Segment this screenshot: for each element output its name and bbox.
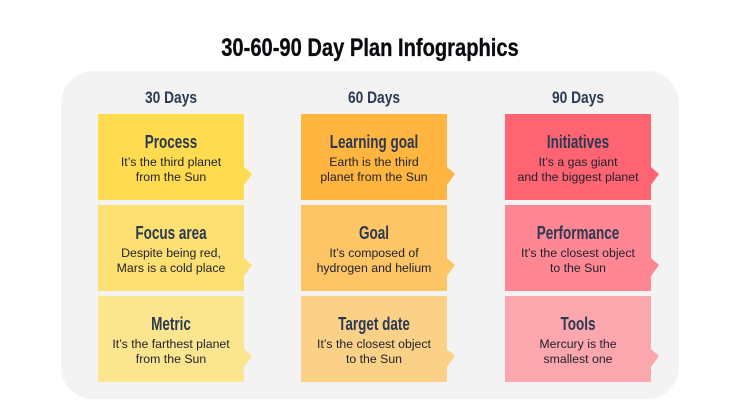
- card: Learning goal: [301, 114, 455, 200]
- heading: 60 Days: 60 Days: [348, 88, 400, 107]
- card: Performance: It’s the closest object: [521, 246, 635, 260]
- card: Metric: from the Sun: [136, 352, 206, 366]
- card: Learning goal: planet from the Sun: [320, 170, 428, 184]
- card: Performance: [505, 205, 659, 291]
- card: Performance: to the Sun: [550, 261, 606, 275]
- card: Tools: [505, 296, 659, 382]
- card: Metric: Metric: [151, 314, 191, 334]
- card: Tools: Tools: [560, 314, 595, 334]
- card: Metric: It’s the farthest planet: [112, 337, 230, 351]
- card: Learning goal: Earth is the third: [329, 155, 419, 169]
- card: Process: [98, 114, 252, 200]
- card: Goal: hydrogen and helium: [317, 261, 431, 275]
- card: Tools: Mercury is the: [539, 337, 617, 351]
- card: Focus area: Despite being red,: [121, 246, 221, 260]
- card: Target date: [301, 296, 455, 382]
- card: Initiatives: It’s a gas giant: [538, 155, 618, 169]
- card: Metric: [98, 296, 252, 382]
- card: Process: It’s the third planet: [121, 155, 221, 169]
- panel: background: [61, 71, 679, 399]
- card: Learning goal: Learning goal: [330, 132, 418, 152]
- card: Initiatives: [505, 114, 659, 200]
- card: Focus area: [98, 205, 252, 291]
- heading: 30 Days: 30 Days: [145, 88, 197, 107]
- card: Initiatives: and the biggest planet: [517, 170, 639, 184]
- card: Initiatives: Initiatives: [547, 132, 609, 152]
- card: Focus area: Mars is a cold place: [117, 261, 225, 275]
- card: Goal: It’s composed of: [329, 246, 419, 260]
- heading: 90 Days: 90 Days: [552, 88, 604, 107]
- card: Process: Process: [145, 132, 197, 152]
- card: Tools: smallest one: [543, 352, 613, 366]
- card: Target date: to the Sun: [346, 352, 402, 366]
- card: Goal: Goal: [359, 223, 389, 243]
- card: Process: from the Sun: [136, 170, 206, 184]
- title: 30-60-90 Day Plan Infographics: [221, 34, 519, 62]
- card: Target date: It’s the closest object: [317, 337, 431, 351]
- card: Focus area: Focus area: [135, 223, 207, 243]
- card: Performance: Performance: [537, 223, 619, 243]
- card: Goal: [301, 205, 455, 291]
- card: Target date: Target date: [338, 314, 410, 334]
